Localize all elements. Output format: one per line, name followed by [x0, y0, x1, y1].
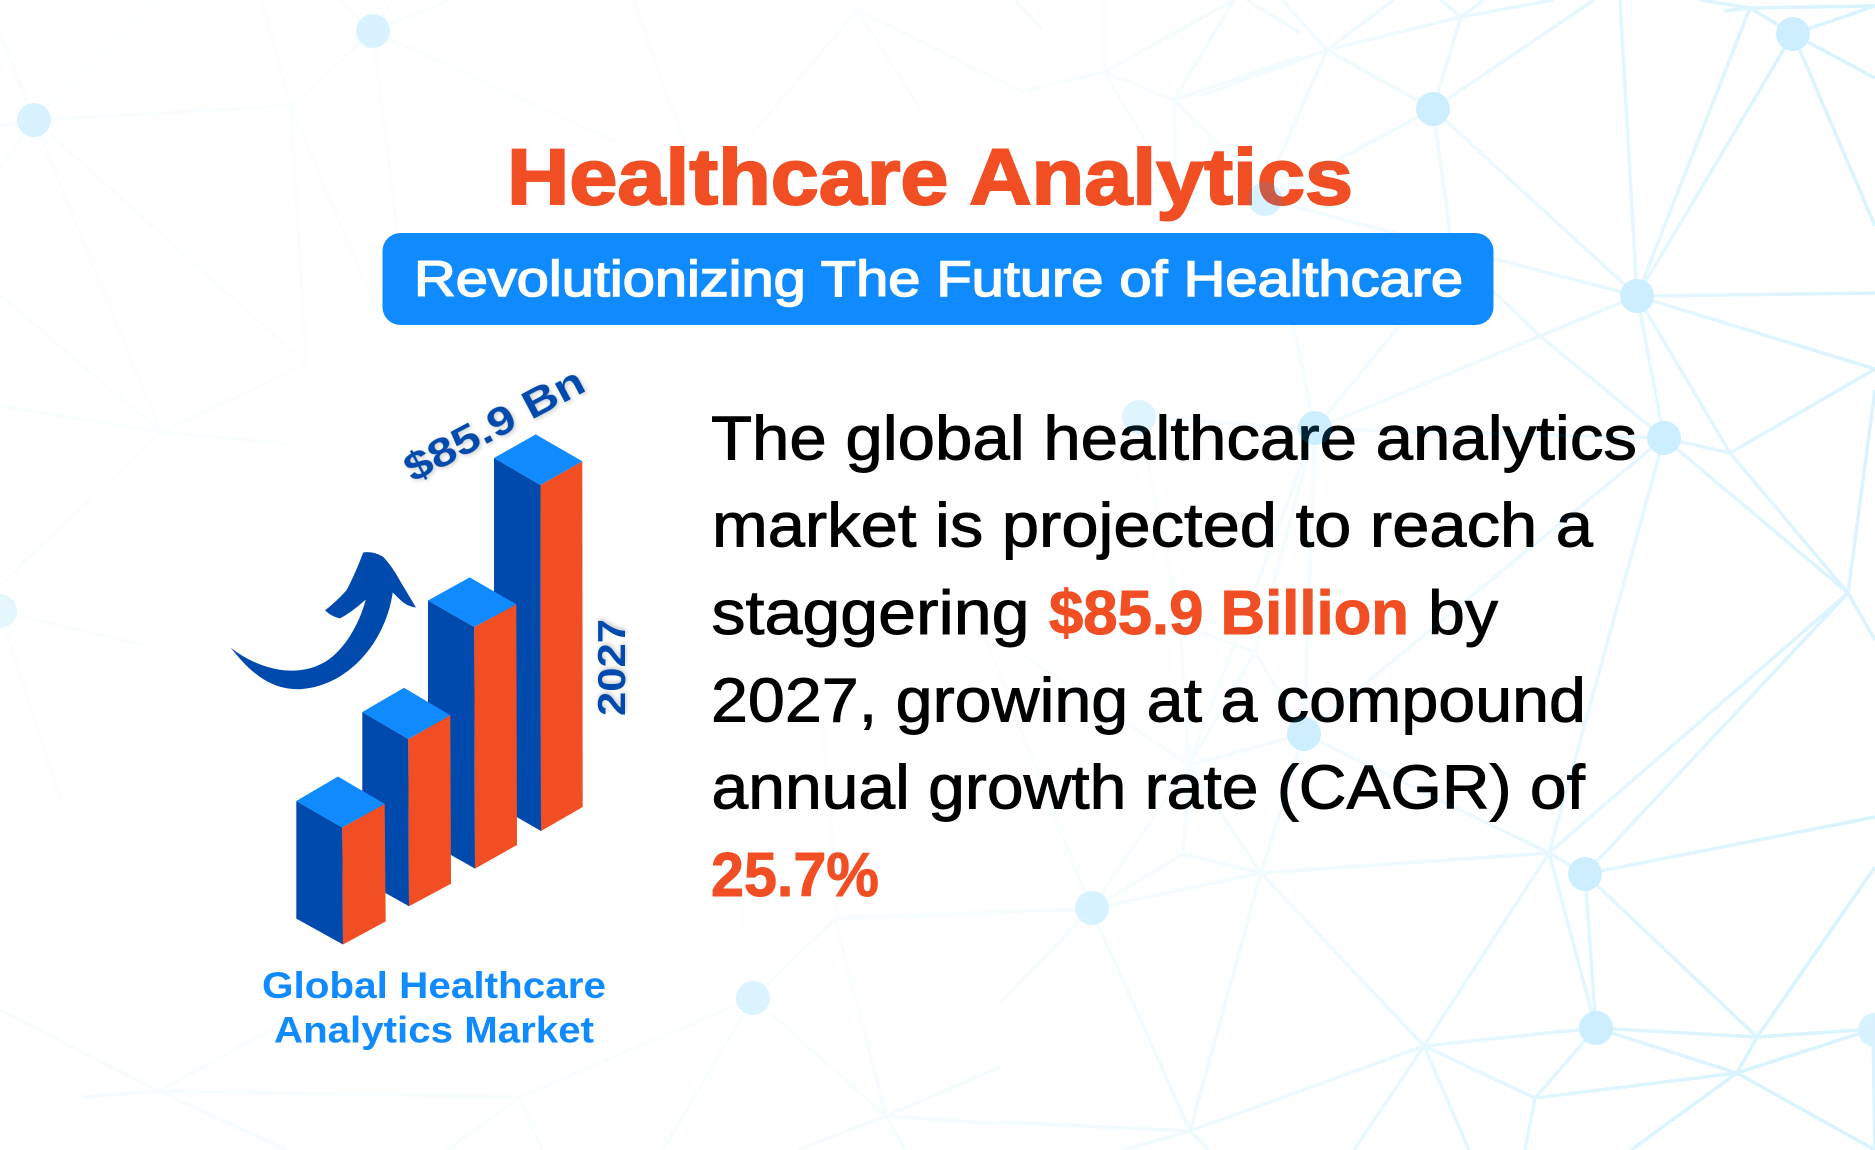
- body paragraph: market is projected to reach a: [712, 492, 1594, 561]
- bar 1: [296, 776, 386, 944]
- subtitle pill: Revolutionizing The Future of Healthcare: [414, 251, 1463, 307]
- subtitle pill: [382, 233, 1494, 325]
- growth arrow: [231, 552, 416, 689]
- body paragraph: 2027, growing at a compound: [711, 666, 1586, 735]
- body paragraph: annual growth rate (CAGR) of: [712, 754, 1586, 823]
- year label: 2027: [591, 619, 634, 716]
- title: Healthcare Analytics: [507, 132, 1353, 221]
- body paragraph: staggering: [712, 579, 1030, 648]
- body paragraph: The global healthcare analytics: [711, 405, 1637, 474]
- chart caption: [262, 965, 606, 1050]
- chart caption: Analytics Market: [274, 1010, 594, 1050]
- body paragraph: [711, 405, 1637, 910]
- bar 4: [494, 434, 583, 831]
- body paragraph: by: [1428, 579, 1498, 648]
- chart caption: Global Healthcare: [262, 965, 606, 1006]
- bar 2: [362, 688, 451, 906]
- value label: $85.9 Bn: [397, 359, 592, 491]
- 3D bar chart: [296, 434, 583, 944]
- body paragraph: $85.9 Billion: [1049, 579, 1409, 648]
- bar 3: [428, 577, 517, 869]
- body paragraph: 25.7%: [711, 841, 879, 910]
